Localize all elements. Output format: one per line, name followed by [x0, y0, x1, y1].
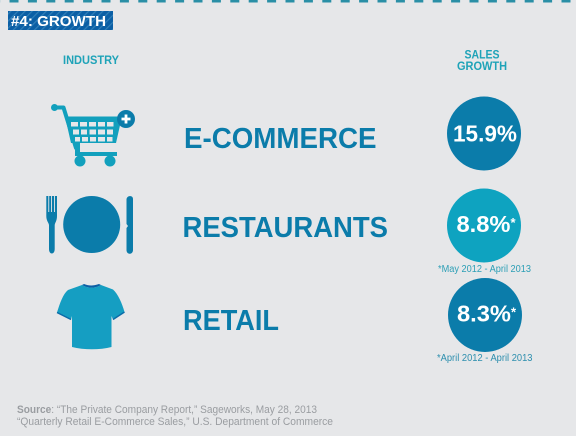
title: #4: Growth: #4: GROWTH: [11, 13, 106, 30]
icon: t-shirt: [57, 284, 124, 349]
footnote: may 2012: *May 2012 - April 2013: [438, 264, 531, 275]
column heading: sales growth: [457, 48, 507, 73]
label: restaurants: RESTAURANTS: [182, 212, 388, 244]
column heading: sales growth: SALES: [464, 48, 500, 62]
circle: 8.8%: *: [510, 215, 516, 230]
column heading: sales growth: GROWTH: [457, 59, 507, 73]
source text: Source: “The Private Company Report,” Sageworks, May 28, 2013: [17, 404, 317, 416]
circle: 8.3%: *: [511, 304, 517, 320]
source text: “Quarterly Retail E-Commerce Sales,” U.S. Department of Commerce: [17, 416, 333, 428]
label: e-commerce: E-COMMERCE: [184, 123, 376, 155]
source text: [17, 404, 333, 428]
circle: 8.3%: 8.3%: [457, 300, 511, 326]
circle: 8.3%: [448, 278, 522, 352]
circle: 8.8%: [447, 188, 521, 262]
column heading: industry: INDUSTRY: [63, 53, 119, 67]
circle: 15.9%: [447, 96, 521, 170]
icon: shopping cart: [51, 104, 135, 166]
footnote: april 2012: *April 2012 - April 2013: [437, 353, 533, 364]
icon: fork, plate and knife: [46, 196, 133, 254]
label: retail: RETAIL: [183, 305, 279, 337]
circle: 15.9%: 15.9%: [453, 120, 517, 146]
circle: 8.8%: 8.8%: [456, 211, 510, 237]
